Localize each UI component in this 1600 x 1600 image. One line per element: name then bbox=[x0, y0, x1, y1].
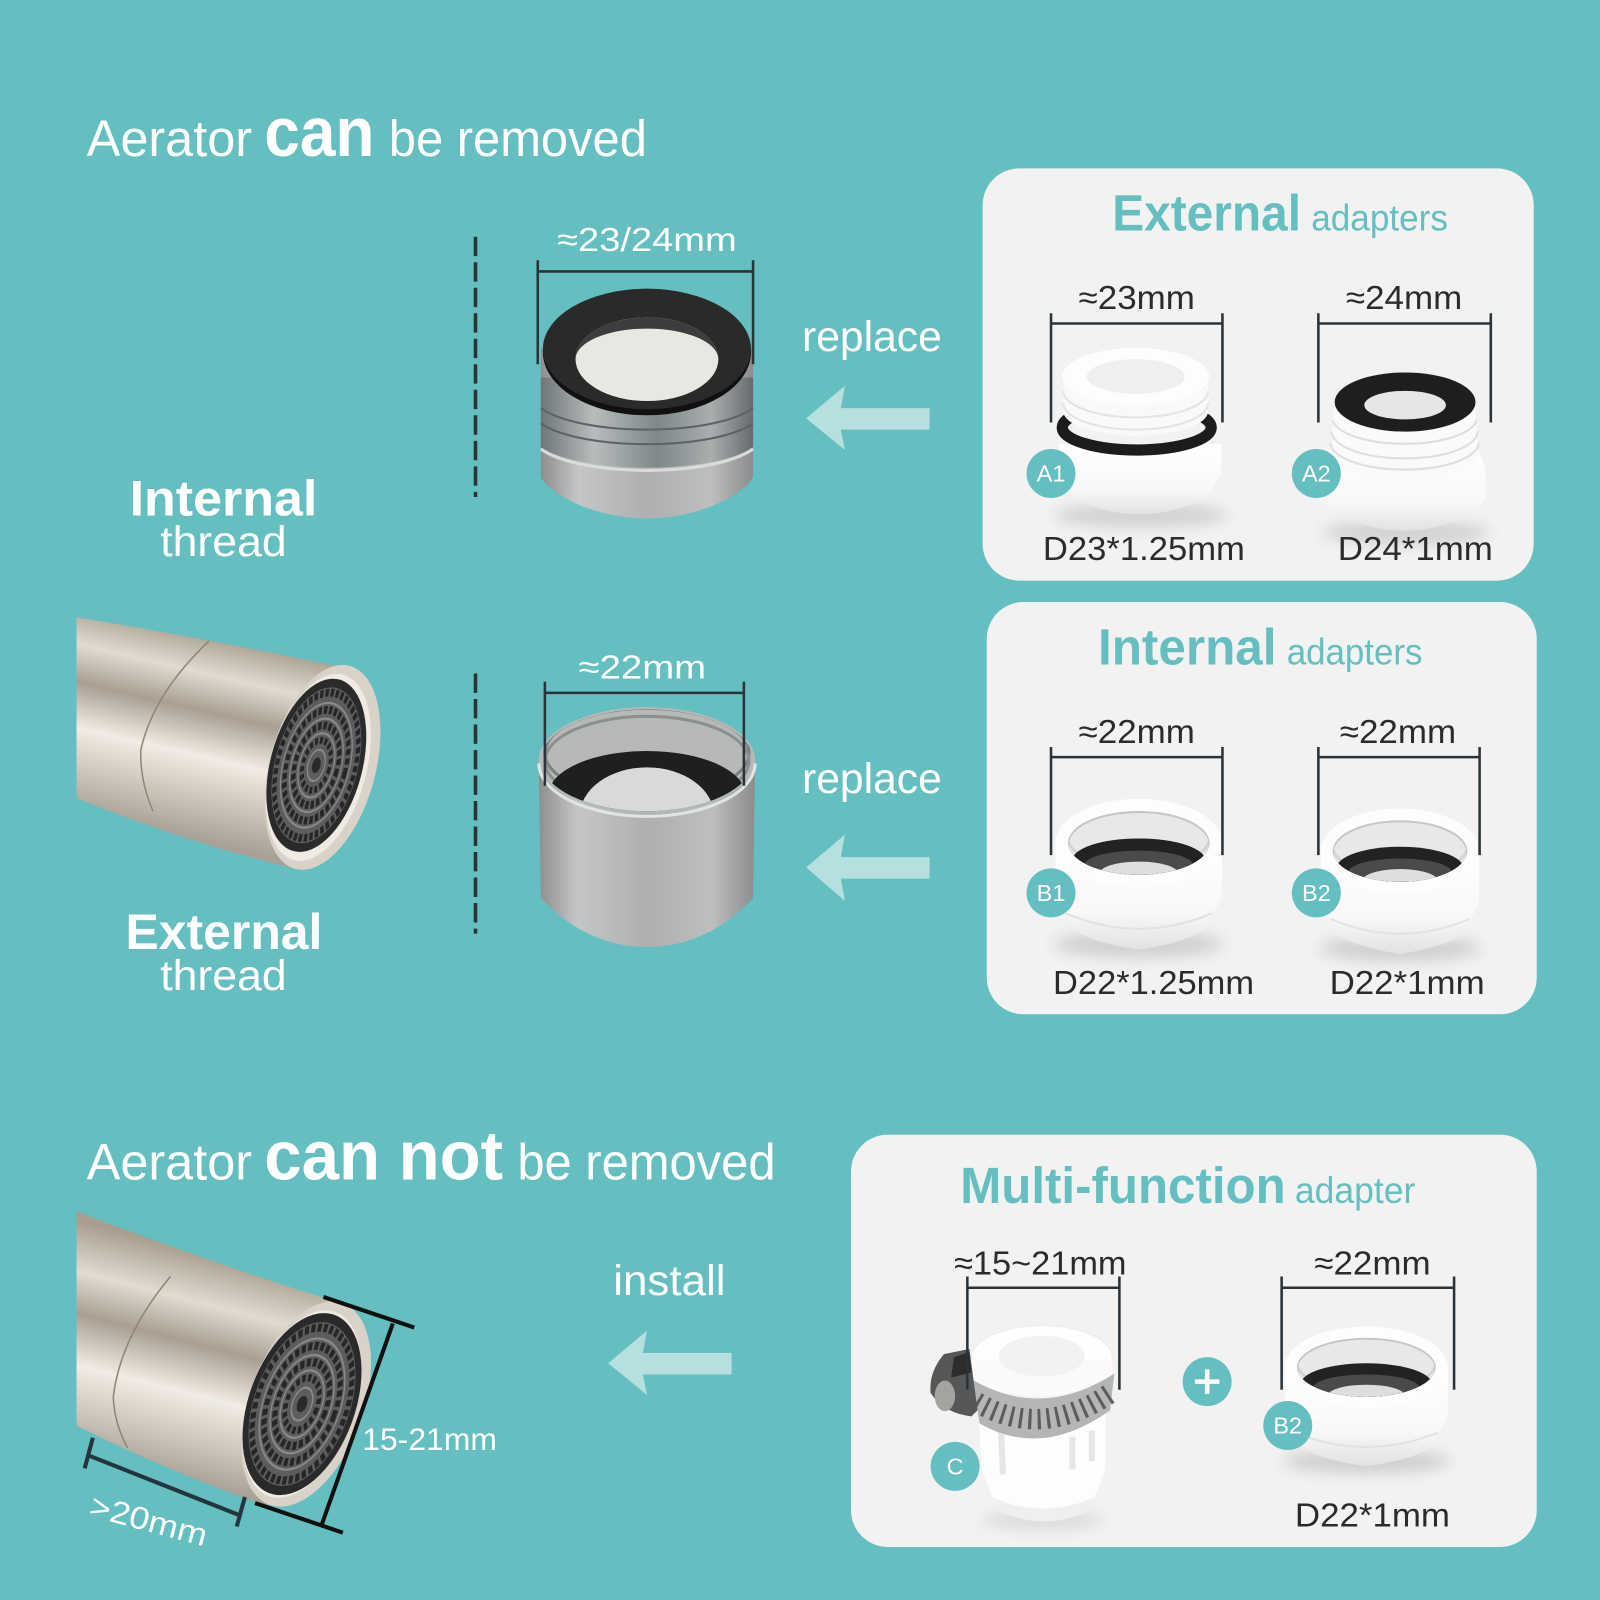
dimension: 15-21mm on faucet bbox=[255, 1297, 497, 1533]
badge B1 bbox=[1027, 868, 1076, 917]
panel: external adapters bbox=[983, 168, 1534, 581]
title: aerator can be removed: can bbox=[264, 93, 374, 171]
heading: external adapters: External bbox=[1112, 185, 1301, 242]
title: aerator can be removed: be removed bbox=[389, 110, 647, 167]
spec: D22*1.25mm: D22*1.25mm bbox=[1053, 965, 1254, 1002]
title: aerator can not be removed: Aerator bbox=[87, 1134, 252, 1191]
dimension: 23mm bbox=[1051, 280, 1222, 422]
dimension: B2 22mm: ≈22mm bbox=[1340, 714, 1456, 751]
spec: D23*1.25mm: D23*1.25mm bbox=[1043, 531, 1245, 568]
adapter A1 bbox=[1054, 348, 1228, 528]
text: replace bottom: replace bbox=[802, 755, 942, 803]
heading: external adapters: adapters bbox=[1311, 198, 1448, 239]
dimension: 15-21mm bbox=[954, 1245, 1127, 1390]
panel: internal adapters bbox=[987, 602, 1537, 1014]
heading: internal adapters bbox=[1098, 618, 1422, 675]
text: replace top: replace bbox=[802, 313, 942, 361]
adapter A2 bbox=[1319, 372, 1490, 545]
dimension: 23mm: ≈23mm bbox=[1079, 280, 1195, 317]
title: aerator can be removed: Aerator bbox=[87, 110, 252, 167]
title: aerator can not be removed bbox=[87, 1117, 776, 1195]
heading: multi-function adapter: adapter bbox=[1295, 1170, 1415, 1211]
dimension: over 20mm on faucet bbox=[85, 1438, 245, 1553]
label: internal thread: Internal bbox=[130, 470, 317, 526]
dimension: 23/24mm: ≈23/24mm bbox=[557, 222, 737, 259]
spec: D22*1mm: D22*1mm bbox=[1330, 965, 1485, 1002]
photo: faucet with non-removable aerator bbox=[77, 1211, 396, 1524]
adapter B2 bbox=[1283, 1327, 1450, 1473]
label: internal thread bbox=[130, 470, 317, 566]
photo: faucet with external thread bbox=[77, 617, 401, 883]
text: install: install bbox=[613, 1257, 726, 1305]
dimension: B2 22mm bbox=[1318, 714, 1480, 855]
dimension: 15-21mm on faucet: 15-21mm bbox=[362, 1421, 497, 1457]
badge B2 bbox=[1292, 868, 1341, 917]
badge A1 bbox=[1027, 449, 1076, 498]
dimension: B1 22mm bbox=[1051, 714, 1222, 855]
dimension: 22mm aerator: ≈22mm bbox=[579, 650, 706, 687]
adapter B1 bbox=[1053, 799, 1224, 957]
spec: D22*1mm: D22*1mm bbox=[1295, 1498, 1450, 1535]
heading: external adapters bbox=[1112, 185, 1448, 242]
dimension: 22mm: ≈22mm bbox=[1314, 1245, 1431, 1282]
dashed divider bottom bbox=[474, 673, 477, 934]
badge A2: A2 bbox=[1302, 461, 1331, 487]
dimension: 23/24mm bbox=[538, 222, 753, 364]
arrow: top replace bbox=[806, 386, 930, 450]
arrow: install bbox=[608, 1331, 732, 1395]
dimension: 24mm bbox=[1318, 280, 1491, 422]
title: aerator can not be removed: be removed bbox=[517, 1134, 776, 1191]
badge A1: A1 bbox=[1037, 461, 1065, 487]
dashed divider top bbox=[474, 237, 477, 497]
label: external thread: thread bbox=[160, 952, 287, 1000]
dimension: 22mm aerator bbox=[545, 650, 744, 786]
dimension: 22mm bbox=[1282, 1245, 1454, 1390]
arrow: bottom replace bbox=[806, 835, 930, 901]
title: aerator can not be removed: can not bbox=[264, 1117, 503, 1195]
spec: D24*1mm: D24*1mm bbox=[1338, 531, 1493, 568]
badge B2: B2 bbox=[1273, 1413, 1302, 1439]
heading: multi-function adapter: Multi-function bbox=[960, 1157, 1286, 1214]
label: external thread: External bbox=[126, 904, 322, 960]
dimension: 15-21mm: ≈15~21mm bbox=[954, 1245, 1127, 1282]
badge B2: B2 bbox=[1302, 880, 1331, 906]
dimension: over 20mm on faucet: >20mm bbox=[86, 1487, 212, 1553]
adapter B2 bbox=[1319, 809, 1481, 961]
heading: internal adapters: adapters bbox=[1287, 631, 1422, 672]
icon: plus bbox=[1183, 1357, 1232, 1406]
label: external thread bbox=[126, 904, 322, 1000]
photo: internal-thread aerator with black washer bbox=[541, 289, 753, 518]
badge A2 bbox=[1292, 449, 1341, 498]
badge C bbox=[931, 1442, 980, 1491]
badge B2 bbox=[1263, 1401, 1312, 1450]
label: internal thread: thread bbox=[160, 518, 287, 566]
dimension: 24mm: ≈24mm bbox=[1346, 280, 1462, 317]
title: aerator can be removed bbox=[87, 93, 647, 171]
photo: external-thread aerator bbox=[539, 707, 755, 947]
badge C: C bbox=[947, 1453, 964, 1479]
badge B1: B1 bbox=[1037, 880, 1065, 906]
adapter C with hose clamp bbox=[930, 1326, 1114, 1529]
panel: multi-function adapter bbox=[851, 1135, 1537, 1547]
heading: internal adapters: Internal bbox=[1098, 618, 1277, 675]
dimension: B1 22mm: ≈22mm bbox=[1079, 714, 1195, 751]
